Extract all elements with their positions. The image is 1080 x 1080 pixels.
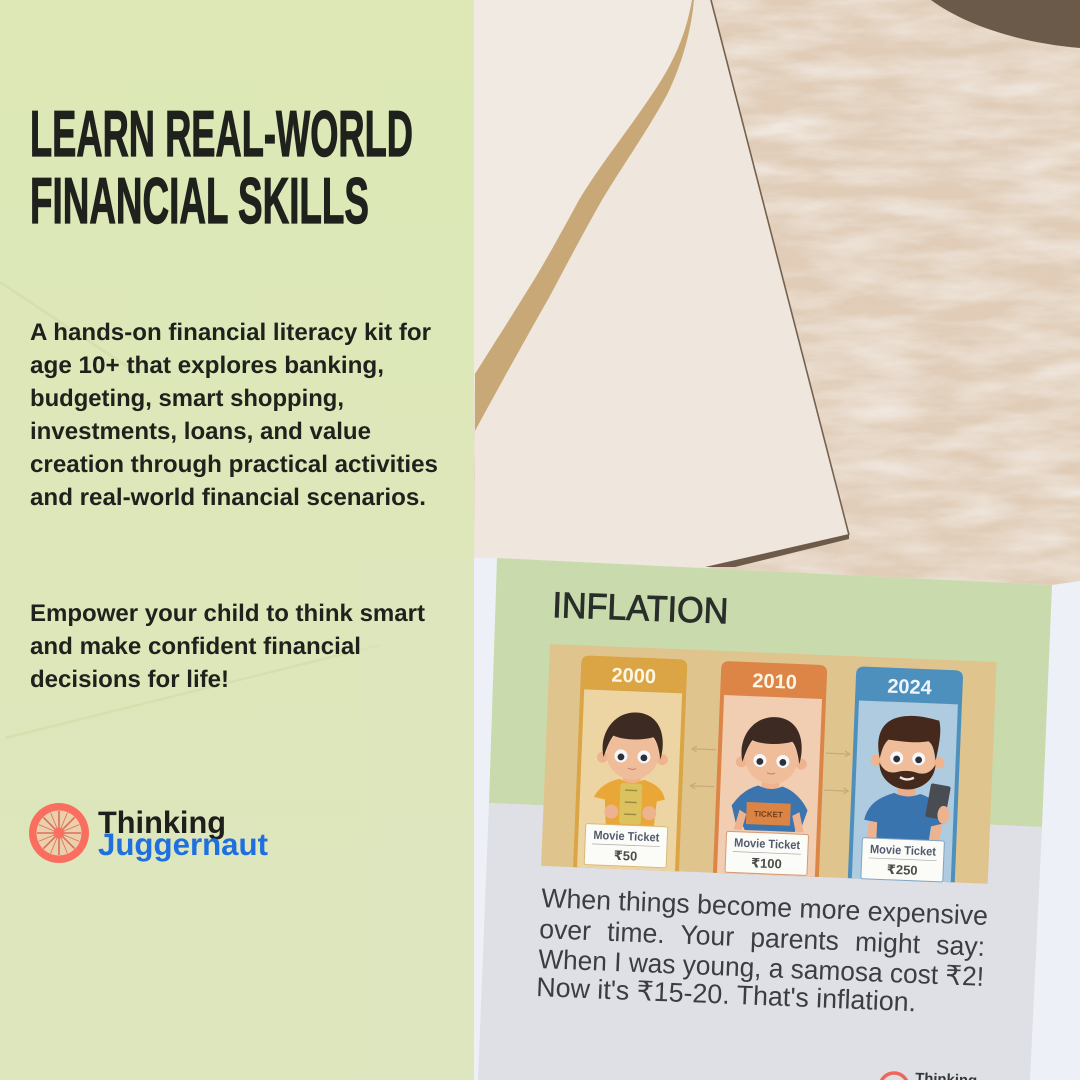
character: boy with ticket sign [731,715,811,832]
text block: kit description [30,319,438,511]
panel: left green text panel [0,0,474,1080]
illustration: movie ticket price over time [541,644,997,884]
icon: dark object in top corner [931,0,1080,48]
ticket label: movie ticket 50: ₹50 [614,848,638,864]
text block: kit description: investments, loans, and value [30,418,371,445]
text block: kit description: and real-world financial scenarios. [30,484,426,511]
ticket label: movie ticket 250: Movie Ticket [870,842,936,859]
character: man with phone [863,714,954,845]
ticket label: movie ticket 100: ₹100 [751,855,782,871]
page text: inflation explanation: over time. Your parents might say: [539,914,986,962]
logo: Thinking Juggernaut: Juggernaut [98,827,268,862]
text block: kit description: A hands-on financial literacy kit for [30,319,431,346]
character: boy with ticket [593,711,670,828]
text block: empower your child: and make confident financial [30,633,361,660]
text block: empower your child: Empower your child to think smart [30,600,425,627]
heading: learn real-world financial skills: LEARN REAL-WORLD [30,97,413,170]
ticket label: movie ticket 100: Movie Ticket [734,836,800,852]
page title: inflation: INFLATION [552,584,729,631]
heading: learn real-world financial skills: FINANCIAL SKILLS [30,164,369,237]
text block: kit description: age 10+ that explores banking, [30,352,384,379]
arrows between cards [690,745,850,795]
card: 2024: 2024 [887,676,933,699]
page text: inflation explanation: When I was young, a samosa cost ₹2! [538,944,985,992]
card: 2000: 2000 [611,665,656,688]
ticket label: movie ticket 50: Movie Ticket [593,828,660,845]
card: 2010: 2010 [752,670,797,694]
ticket label: movie ticket 100 [725,831,809,875]
page logo: clipped thinking juggernaut [880,1070,977,1080]
heading: learn real-world financial skills [30,97,413,237]
card: 2000 [573,655,687,871]
ticket label: movie ticket 250: ₹250 [887,862,918,878]
page: grey lower area [478,803,1042,1080]
panel: cream paper sheets [474,0,849,568]
logo: Thinking Juggernaut: Thinking [98,805,226,840]
card: 2010 [713,661,827,877]
ticket label: movie ticket 250 [861,838,944,882]
text block: kit description: creation through practical activities [30,451,438,478]
page text: inflation explanation [536,883,989,1017]
text block: empower your child: decisions for life! [30,666,229,693]
panel: stone background photo [474,0,1080,600]
card: 2024 [848,666,963,882]
page text: inflation explanation: Now it's ₹15-20. That's inflation. [536,972,917,1017]
page text: inflation explanation: When things become more expensive [541,883,989,931]
logo: Thinking Juggernaut [29,803,268,863]
ticket label: movie ticket 50 [584,824,668,868]
panel: inflation book page [474,558,1080,1080]
text block: kit description: budgeting, smart shopping, [30,385,344,412]
page: green header band [489,558,1052,827]
text block: empower your child [30,600,425,693]
icon: wheel [29,803,89,863]
character: boy with ticket sign: TICKET [754,809,783,819]
